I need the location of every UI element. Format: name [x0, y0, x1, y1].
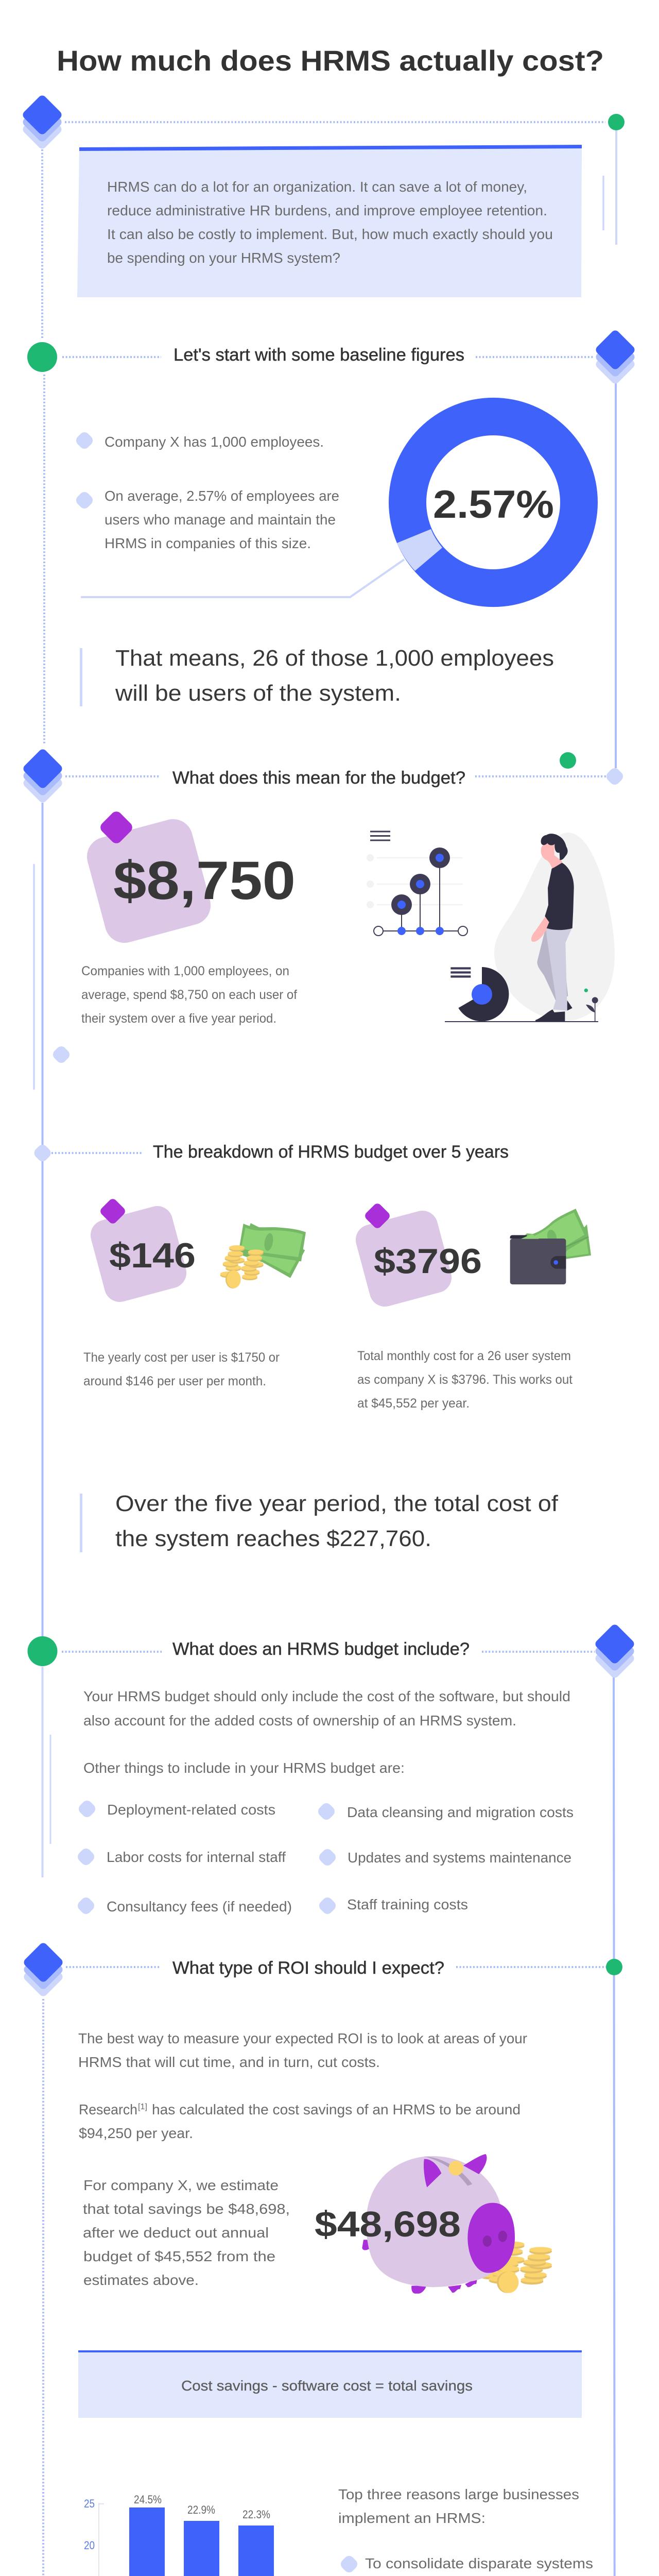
stat: $3796: $3796 — [374, 1242, 482, 1281]
text: company X savings — [83, 2177, 290, 2288]
text: ROI intro — [78, 2030, 527, 2141]
text: ROI intro: has calculated the cost savings of an HRMS to be around — [152, 2102, 521, 2117]
text: $8,750 explanation: average, spend $8,750 on each user of — [81, 988, 297, 1002]
icon: green node section 2 — [27, 342, 57, 372]
list: other budget items: Consultancy fees (if needed) — [107, 1899, 292, 1914]
intro text: It can also be costly to implement. But, how much exactly should you — [107, 226, 553, 242]
icon: diamond stack section 3 — [28, 754, 58, 798]
icon: light node — [612, 773, 618, 779]
text: ROI intro: HRMS that will cut time, and in turn, cut costs. — [78, 2054, 380, 2070]
panel: formula: Cost savings - software cost = total savings — [181, 2378, 473, 2394]
bullets: baseline facts: Company X has 1,000 employees. — [105, 434, 324, 450]
bar chart: top reasons — [84, 2493, 304, 2576]
text: company X savings: after we deduct out annual — [83, 2225, 269, 2241]
panel: intro — [77, 145, 582, 297]
text: $146 explanation: around $146 per user per month. — [83, 1374, 266, 1388]
text: ROI intro: $94,250 per year. — [79, 2125, 193, 2141]
list: other budget items — [83, 1802, 574, 1914]
list: other budget items: Data cleansing and migration costs — [347, 1804, 574, 1820]
stat: $146 — [87, 1202, 196, 1306]
text: budget include intro: Other things to include in your HRMS budget are: — [83, 1760, 405, 1776]
stat: $8,750: $8,750 — [113, 851, 296, 911]
text: ROI intro: [1] — [138, 2103, 147, 2111]
bullets: baseline facts: HRMS in companies of this size. — [105, 535, 311, 551]
text: budget include intro — [83, 1688, 570, 1776]
callout: total cost: Over the five year period, the total cost of — [115, 1491, 559, 1516]
text: ROI intro: The best way to measure your expected ROI is to look at areas of your — [78, 2030, 527, 2046]
heading: breakdown: The breakdown of HRMS budget over 5 years — [153, 1142, 509, 1162]
icon: wallet with cash — [510, 1209, 591, 1284]
icon: light node section 3 sub — [58, 1052, 64, 1058]
illustration: lollipop chart — [367, 832, 467, 936]
text: $146 explanation: The yearly cost per user is $1750 or — [83, 1350, 280, 1365]
bullets: baseline facts — [81, 434, 339, 551]
bar chart: top reasons: 24.5% — [134, 2493, 162, 2506]
stat: $8,750 — [82, 815, 296, 947]
text: budget include intro: Your HRMS budget should only include the cost of the software, but should — [83, 1688, 570, 1704]
callout: 26 users — [80, 646, 554, 706]
illustration: person with pie chart — [445, 833, 615, 1022]
list: other budget items: Updates and systems maintenance — [348, 1850, 571, 1866]
icon: diamond stack top left — [27, 100, 57, 144]
stat: $48,698: $48,698 — [315, 2204, 461, 2244]
text: $8,750 explanation — [81, 964, 297, 1026]
text: $3796 explanation — [357, 1349, 573, 1411]
text: budget include intro: also account for the added costs of ownership of an HRMS system. — [83, 1713, 516, 1728]
text: $8,750 explanation: Companies with 1,000 employees, on — [81, 964, 289, 978]
callout: 26 users: will be users of the system. — [115, 681, 401, 706]
callout: total cost: the system reaches $227,760. — [115, 1526, 431, 1551]
bullets: baseline facts: users who manage and maintain the — [105, 512, 336, 528]
text: ROI intro: Research — [79, 2102, 137, 2117]
text: company X savings: that total savings be $48,698, — [83, 2201, 290, 2217]
bar chart: top reasons: 22.9% — [187, 2503, 215, 2516]
icon: piggy bank with coins — [362, 2154, 552, 2294]
bar chart: top reasons: 20 — [84, 2539, 95, 2552]
list: other budget items: Staff training costs — [347, 1896, 468, 1912]
list: other budget items: Labor costs for internal staff — [107, 1849, 286, 1865]
text: $3796 explanation: as company X is $3796. This works out — [357, 1372, 573, 1387]
text: $8,750 explanation: their system over a five year period. — [81, 1011, 276, 1026]
heading: budget include: What does an HRMS budget include? — [172, 1639, 470, 1659]
list: top three reasons: implement an HRMS: — [338, 2510, 485, 2526]
icon: diamond stack section 6 — [28, 1947, 58, 1992]
bullets: baseline facts: On average, 2.57% of employees are — [105, 488, 339, 504]
text: company X savings: For company X, we estimate — [83, 2177, 279, 2193]
heading: ROI: What type of ROI should I expect? — [172, 1958, 444, 1978]
chart: donut 2.57% — [81, 398, 598, 607]
text: $146 explanation — [83, 1350, 280, 1388]
title: How much does HRMS actually cost? — [57, 44, 604, 77]
callout: total cost — [80, 1491, 559, 1552]
icon: green node section 6 — [606, 1959, 622, 1975]
text: company X savings: estimates above. — [83, 2272, 199, 2288]
bar chart: top reasons: 22.3% — [242, 2508, 270, 2521]
text: $3796 explanation: at $45,552 per year. — [357, 1396, 470, 1411]
heading: baseline figures: Let's start with some baseline figures — [174, 345, 464, 365]
list: top three reasons — [338, 2486, 593, 2576]
icon: money and coins — [220, 1223, 306, 1289]
text: $3796 explanation: Total monthly cost for a 26 user system — [357, 1349, 571, 1363]
icon: diamond stack section 5 — [600, 1629, 630, 1673]
icon: diamond stack section 2 — [600, 335, 630, 379]
list: top three reasons: To consolidate disparate systems — [365, 2555, 593, 2571]
intro text — [107, 179, 553, 266]
stat: $146: $146 — [109, 1236, 196, 1275]
intro text: reduce administrative HR burdens, and improve employee retention. — [107, 202, 547, 218]
panel: formula — [78, 2350, 582, 2418]
icon: green dot — [560, 752, 576, 769]
text: company X savings: budget of $45,552 from the — [83, 2248, 275, 2264]
icon: light node section 4 — [39, 1150, 45, 1156]
stat: $3796 — [352, 1207, 482, 1310]
chart: donut 2.57%: 2.57% — [433, 483, 554, 527]
callout: 26 users: That means, 26 of those 1,000 employees — [115, 646, 554, 671]
intro text: HRMS can do a lot for an organization. It can save a lot of money, — [107, 179, 527, 195]
icon: green node section 5 — [28, 1636, 58, 1666]
icon: green node top right — [608, 114, 625, 130]
list: other budget items: Deployment-related costs — [107, 1802, 275, 1818]
heading: budget: What does this mean for the budget? — [172, 768, 465, 788]
bar chart: top reasons: 25 — [84, 2497, 95, 2510]
intro text: be spending on your HRMS system? — [107, 250, 340, 266]
list: top three reasons: Top three reasons large businesses — [338, 2486, 579, 2502]
